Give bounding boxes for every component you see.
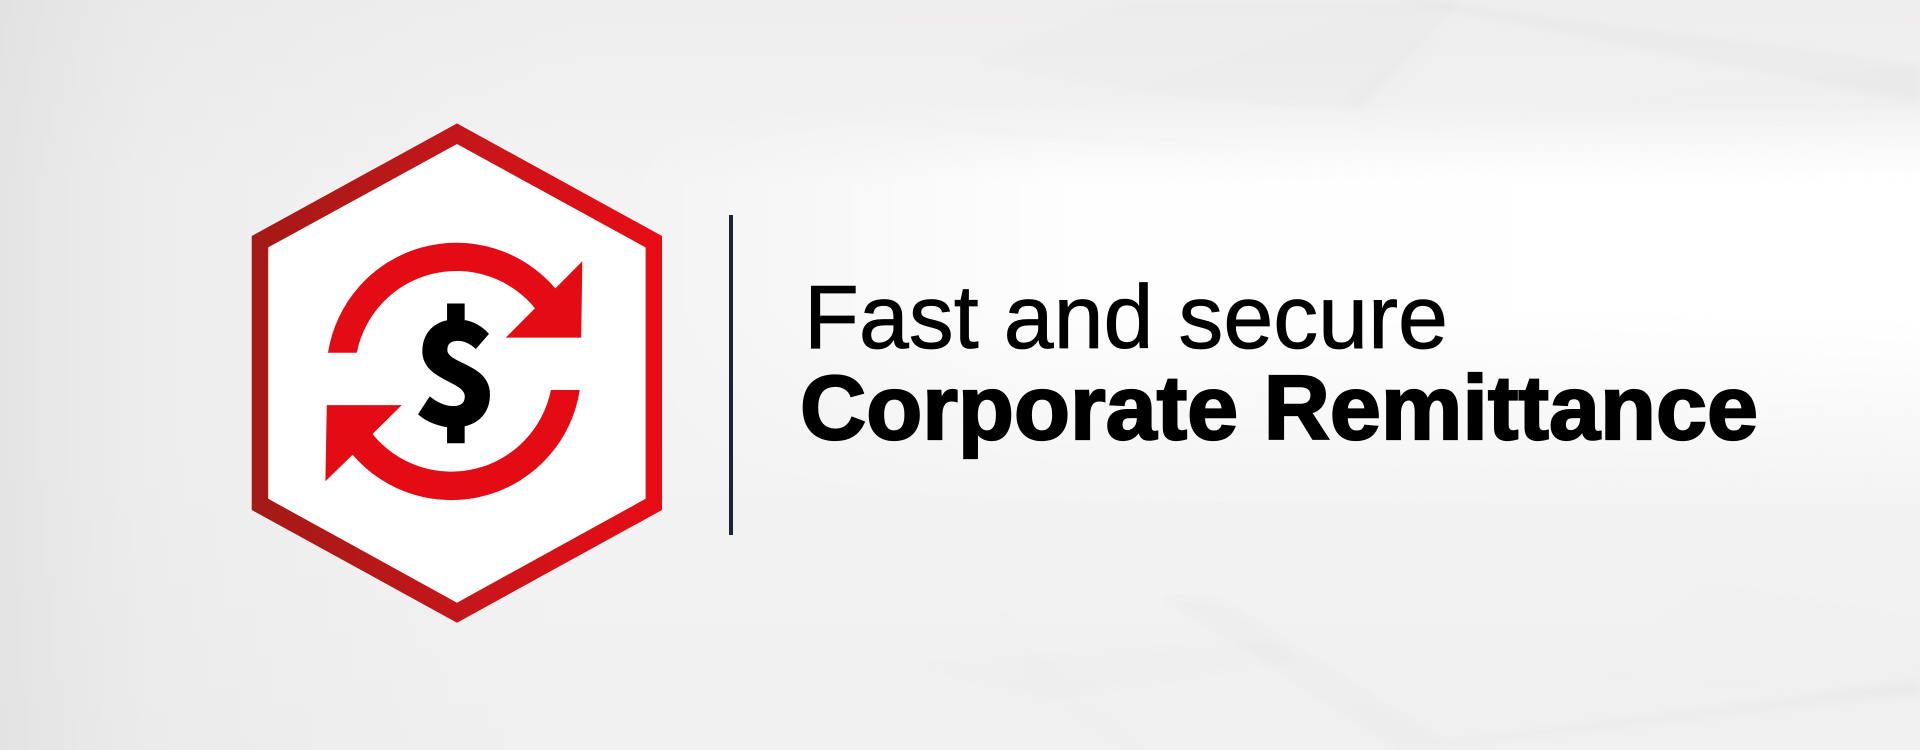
icon: dollar sign: $ [413,260,499,466]
heading line 1: Fast and secure [804,268,1448,368]
icon: counter-clockwise arrow [325,390,580,500]
icon: clockwise arrow [328,243,582,353]
hexagon inner panel [268,144,646,603]
heading [800,268,1758,459]
hexagon frame [252,123,662,623]
icon: hexagon badge with remittance arrows [252,123,662,623]
divider line [729,215,733,535]
heading line 2: Corporate Remittance [800,358,1758,459]
